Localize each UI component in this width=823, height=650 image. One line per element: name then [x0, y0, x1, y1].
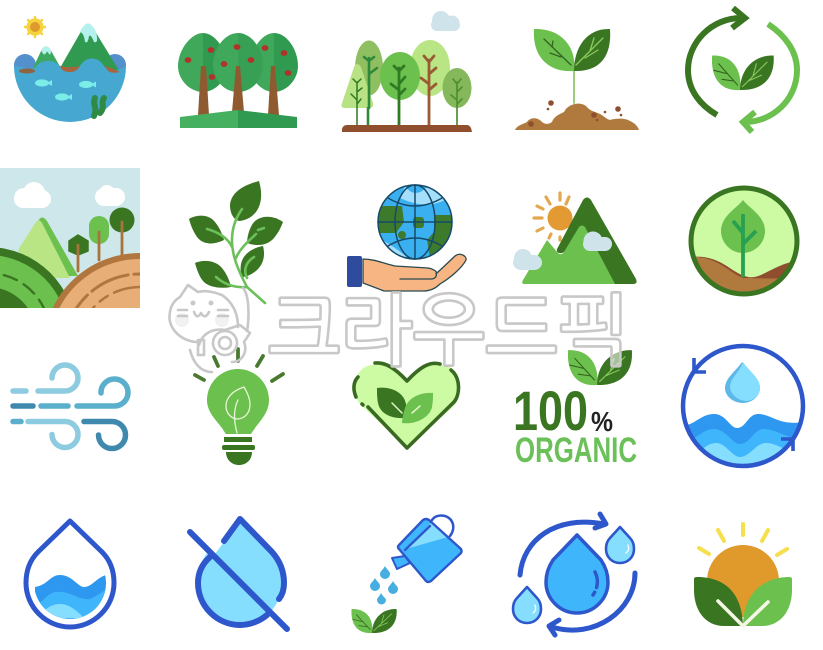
percent text: %	[591, 406, 613, 437]
100 text: 100	[513, 379, 588, 442]
icon: leaf recycling arrows	[688, 8, 797, 132]
light arrow	[743, 24, 797, 132]
organic text: ORGANIC	[515, 431, 637, 470]
white cut above slash	[190, 515, 240, 558]
globe	[378, 185, 452, 266]
heart leaves	[377, 388, 433, 423]
ring and arrows	[683, 346, 803, 466]
icon: lake with mountains	[14, 17, 126, 122]
icon: forest	[341, 11, 472, 132]
trees	[341, 40, 472, 126]
light mountain	[522, 226, 615, 284]
leaf outline	[226, 387, 250, 433]
sun	[25, 17, 45, 37]
bulb	[207, 369, 269, 434]
brown hill	[52, 253, 140, 308]
watermark mascot	[170, 285, 250, 372]
watermark	[170, 285, 630, 372]
fish	[35, 79, 96, 101]
icon: tree badge	[690, 188, 800, 300]
ground	[696, 256, 790, 292]
icon: heart with leaves	[354, 363, 460, 448]
sky	[0, 168, 140, 290]
green hill	[0, 248, 64, 308]
soil dots	[528, 100, 622, 127]
leaf pair	[712, 56, 774, 90]
seaweed	[94, 98, 104, 116]
bulb base	[222, 437, 255, 465]
rays	[699, 524, 787, 555]
icon: mountain and sun	[513, 193, 637, 284]
rays	[195, 349, 283, 381]
waves	[688, 414, 798, 464]
outline	[26, 521, 114, 627]
soil mound	[515, 104, 639, 130]
drop outline	[198, 519, 284, 625]
branch leaves	[189, 181, 283, 288]
leaf tree	[721, 200, 765, 277]
icon: landscape scene	[0, 168, 140, 308]
clouds	[513, 232, 612, 270]
soil strip	[342, 125, 472, 132]
sun	[707, 545, 779, 617]
icon: leafy branch	[189, 181, 283, 303]
lake bowl	[14, 24, 126, 122]
landscape trees	[69, 208, 134, 271]
icon: eco light bulb	[195, 349, 283, 465]
drop	[725, 362, 760, 403]
leaf pair	[568, 350, 632, 385]
heart outline	[354, 363, 459, 448]
hand	[363, 254, 466, 291]
center tree	[213, 33, 263, 112]
seedling leaves	[351, 609, 397, 633]
icon: water cycle circle	[680, 346, 805, 480]
clouds	[14, 182, 125, 208]
icon: no water	[190, 515, 287, 629]
icon: water cycle drops	[513, 514, 635, 635]
ground	[180, 110, 297, 128]
fruits	[185, 44, 291, 80]
cuff	[347, 256, 362, 287]
icon: sprout in soil	[515, 29, 639, 130]
dark leaf	[694, 577, 743, 626]
sprout leaves	[534, 29, 610, 103]
big drop	[546, 535, 608, 613]
spout	[392, 556, 410, 569]
heart	[354, 365, 460, 448]
sun and rays	[534, 193, 572, 240]
icon: hand holding globe	[347, 185, 466, 291]
dark arrow	[688, 8, 745, 115]
watermark text: 크라우드픽	[268, 292, 630, 370]
small drop bottom	[513, 587, 541, 623]
leaf veins	[718, 601, 768, 626]
stem	[207, 209, 265, 303]
water drops	[370, 566, 398, 604]
icon: fruit trees	[178, 33, 298, 128]
icon: water drop outline	[26, 521, 114, 627]
icon: watering can	[351, 516, 462, 633]
arrows	[520, 514, 635, 635]
can body	[398, 519, 462, 582]
badge: 100% organic	[513, 350, 637, 470]
icon: sun and leaves	[694, 524, 792, 626]
ring	[691, 188, 797, 294]
drop fill	[198, 519, 282, 625]
badge background	[691, 188, 797, 294]
icon: wind	[13, 365, 128, 448]
cloud	[431, 11, 460, 31]
mountain	[18, 218, 78, 278]
left tree	[178, 33, 227, 115]
right tree	[250, 33, 298, 115]
waves	[35, 575, 106, 620]
handle	[432, 516, 453, 536]
light leaf	[743, 577, 792, 626]
slash	[190, 532, 287, 629]
small drop top	[606, 527, 634, 563]
dark mountain	[557, 198, 637, 284]
